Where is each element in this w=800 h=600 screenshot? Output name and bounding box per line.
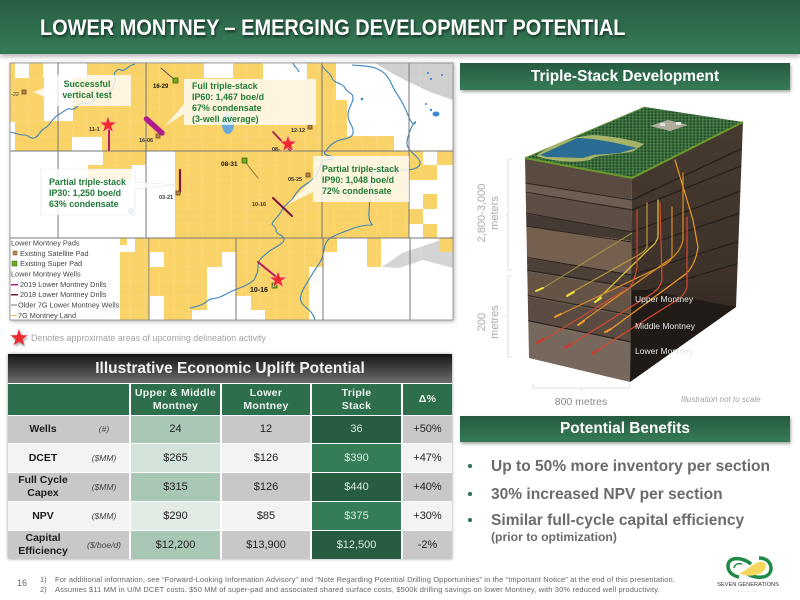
map: well lines xyxy=(109,68,292,280)
callout: full triple-stack: 67% condensate xyxy=(192,103,262,113)
footnotes xyxy=(40,575,675,594)
callout: partial triple-stack IP90: IP90: 1,048 boe/d xyxy=(322,175,394,185)
row: capital efficiency: ($/boe/d) xyxy=(87,540,121,550)
benefits list xyxy=(468,458,770,544)
block: left face strata xyxy=(525,159,632,382)
block: well tips xyxy=(536,288,611,354)
callout: full triple-stack: (3-well average) xyxy=(192,114,259,124)
labels: zones xyxy=(635,294,696,356)
callout: partial triple-stack IP90 xyxy=(287,156,409,205)
row: NPV: +30% xyxy=(413,510,442,522)
title: LOWER MONTNEY – EMERGING DEVELOPMENT POTENTIAL xyxy=(40,15,625,40)
row: capital efficiency: $12,500 xyxy=(337,538,376,550)
map: rivers xyxy=(10,63,420,320)
map legend: Older 7G Lower Montney Wells xyxy=(18,300,120,310)
table heading xyxy=(8,354,452,383)
note text: Denotes approximate areas of upcoming delineation activity xyxy=(31,333,266,343)
row: NPV: $290 xyxy=(163,510,188,522)
block: right face strata xyxy=(630,123,743,382)
icon: star north-east xyxy=(279,135,297,151)
row: capital efficiency: Capital xyxy=(25,532,60,544)
footnotes: For additional information, see “Forward-Looking Information Advisory” and “Note Regarding Potential Drilling Opportunities” in the “Important Notice” at the end of this presentation. xyxy=(55,575,675,584)
labels: zones: Middle Montney xyxy=(635,321,696,331)
logo text: SEVEN GENERATIONS xyxy=(717,582,779,588)
callout: partial triple-stack IP90: 72% condensate xyxy=(322,186,392,196)
map legend xyxy=(10,238,120,320)
table heading: Illustrative Economic Uplift Potential xyxy=(95,360,365,377)
callout: successful vertical test: Successful xyxy=(64,79,110,89)
map: well labels xyxy=(11,84,305,294)
benefit 3 xyxy=(468,512,744,544)
heading: triple-stack development xyxy=(460,63,790,90)
row: full cycle capex: $315 xyxy=(163,480,188,492)
map legend: Lower Montney Wells xyxy=(11,270,81,278)
table header row: Montney xyxy=(243,400,289,412)
row: capital efficiency xyxy=(8,531,452,559)
label: width: 800 metres xyxy=(555,396,607,408)
table header row: Triple xyxy=(342,386,371,398)
benefit 1: Up to 50% more inventory per section xyxy=(491,458,770,475)
row: NPV: $85 xyxy=(257,510,275,522)
row: DCET xyxy=(8,444,452,472)
map: well labels: -22 xyxy=(11,92,19,98)
row: DCET: +47% xyxy=(413,452,442,464)
row: full cycle capex xyxy=(8,473,452,501)
row: full cycle capex: $126 xyxy=(254,480,278,492)
footnotes: 2) xyxy=(40,585,47,594)
label: zone height: 200 xyxy=(476,313,488,331)
row: wells: +50% xyxy=(413,423,442,435)
row: DCET: $390 xyxy=(344,452,369,464)
icon: red star xyxy=(10,329,28,348)
map: well labels: 05-25 xyxy=(288,177,302,183)
note: not to scale: Illustration not to scale xyxy=(681,395,761,404)
map: well labels: 10-16 xyxy=(250,287,268,294)
benefit 3: (prior to optimization) xyxy=(491,530,617,544)
row: wells xyxy=(8,416,452,443)
map legend: 2018 Lower Montney Drills xyxy=(20,290,107,299)
labels: zones: Lower Montney xyxy=(635,346,694,356)
block: well paths xyxy=(540,160,698,353)
map: well labels: 10-16 xyxy=(252,202,266,208)
row: wells: 12 xyxy=(260,423,272,435)
map: well labels: 03-21 xyxy=(159,195,173,201)
callout: successful vertical test: vertical test xyxy=(62,90,112,100)
map: small lakes xyxy=(128,72,443,214)
row: NPV: $375 xyxy=(344,510,369,522)
footnotes: 1) xyxy=(40,575,47,584)
row: DCET: ($MM) xyxy=(92,452,116,462)
row: NPV: NPV xyxy=(32,510,54,522)
map: well labels: 12-12 xyxy=(291,128,305,134)
map legend: 2019 Lower Montney Drills xyxy=(20,280,107,289)
label: depth overburden: meters xyxy=(489,196,501,230)
map: well labels: 11-1 xyxy=(89,127,100,133)
map: land parcels xyxy=(10,63,453,320)
row: full cycle capex: +40% xyxy=(413,480,442,492)
row: wells: 24 xyxy=(169,423,182,435)
heading: triple-stack development: Triple-Stack Development xyxy=(531,68,719,85)
logo dots: ...... xyxy=(738,588,758,594)
legend note with star xyxy=(10,329,266,348)
map: well labels: 08- xyxy=(272,147,280,153)
diagram: geological block xyxy=(476,106,761,408)
callout: partial triple-stack IP30: Partial triple-stack xyxy=(49,177,126,187)
title banner xyxy=(0,0,800,54)
map legend: Existing Satellite Pad xyxy=(20,249,89,258)
row: capital efficiency: $12,200 xyxy=(156,538,195,550)
row: DCET: $126 xyxy=(254,452,278,464)
row: full cycle capex: ($MM) xyxy=(92,482,116,492)
row: NPV xyxy=(8,502,452,530)
map: pads xyxy=(22,78,312,288)
benefit 3: Similar full-cycle capital efficiency xyxy=(491,512,744,529)
map legend: Lower Montney Pads xyxy=(11,238,80,248)
table header row xyxy=(8,384,452,415)
table header row: Lower xyxy=(250,386,282,398)
row: capital efficiency: Efficiency xyxy=(18,545,68,557)
panel: map xyxy=(8,61,457,324)
icon: star south xyxy=(269,271,287,287)
logo: Seven Generations xyxy=(717,556,779,594)
surface: well pad xyxy=(650,120,688,131)
row: full cycle capex: $440 xyxy=(344,480,369,492)
callout: partial triple-stack IP30: IP30: 1,250 boe/d xyxy=(49,188,121,198)
surface: lake xyxy=(540,138,637,158)
label: depth overburden: 2,800-3,000 xyxy=(476,184,488,242)
callout: partial triple-stack IP90: Partial triple-stack xyxy=(322,164,399,174)
map legend: Existing Super Pad xyxy=(20,259,82,268)
row: capital efficiency: $13,900 xyxy=(246,538,286,550)
map: well labels: 08-31 xyxy=(221,161,238,168)
labels: zones: Upper Montney xyxy=(635,294,694,304)
map: section grid xyxy=(10,63,453,320)
row: DCET: $265 xyxy=(163,452,188,464)
footnotes: Assumes $11 MM in U/M DCET costs. $50 MM of super-pad and associated shared surface costs, $500k drilling savings on lower Montney, with 30% reduced well productivity. xyxy=(55,585,660,594)
row: full cycle capex: Full Cycle xyxy=(18,474,68,486)
table header row: Upper & Middle xyxy=(135,386,216,398)
callout: partial triple-stack IP30 xyxy=(41,169,176,215)
heading: potential benefits: Potential Benefits xyxy=(560,420,690,437)
row: wells: 36 xyxy=(350,423,363,435)
map: well labels: 16-06 xyxy=(139,138,153,144)
icon: infinity mark xyxy=(726,556,773,579)
table header row: Δ% xyxy=(419,393,436,405)
table header row: Stack xyxy=(342,400,371,412)
page number: 16 xyxy=(17,578,27,588)
row: wells: (#) xyxy=(99,424,109,434)
block: forest surface xyxy=(525,107,743,178)
callout: full triple-stack: IP60: 1,467 boe/d xyxy=(192,92,264,102)
callout: successful vertical test xyxy=(33,75,131,106)
row: full cycle capex: Capex xyxy=(27,487,59,499)
callout: full triple-stack xyxy=(165,79,316,126)
callout: full triple-stack: Full triple-stack xyxy=(192,81,258,91)
surface: lake bank xyxy=(536,135,644,162)
label: zone height: metres xyxy=(489,305,501,339)
benefit 2: 30% increased NPV per section xyxy=(491,486,723,503)
bracket: depth xyxy=(505,159,630,391)
table header row: Montney xyxy=(153,400,198,412)
row: wells: Wells xyxy=(29,423,57,435)
row: capital efficiency: -2% xyxy=(418,538,437,550)
callout: partial triple-stack IP30: 63% condensate xyxy=(49,199,119,209)
icon: star north-west xyxy=(99,116,117,132)
map legend: 7G Montney Land xyxy=(18,311,76,320)
row: DCET: DCET xyxy=(29,452,57,464)
heading: potential benefits xyxy=(460,416,790,442)
panel: economic uplift table xyxy=(8,354,452,559)
map: well labels: 16-29 xyxy=(153,84,169,90)
row: NPV: ($MM) xyxy=(92,510,116,520)
